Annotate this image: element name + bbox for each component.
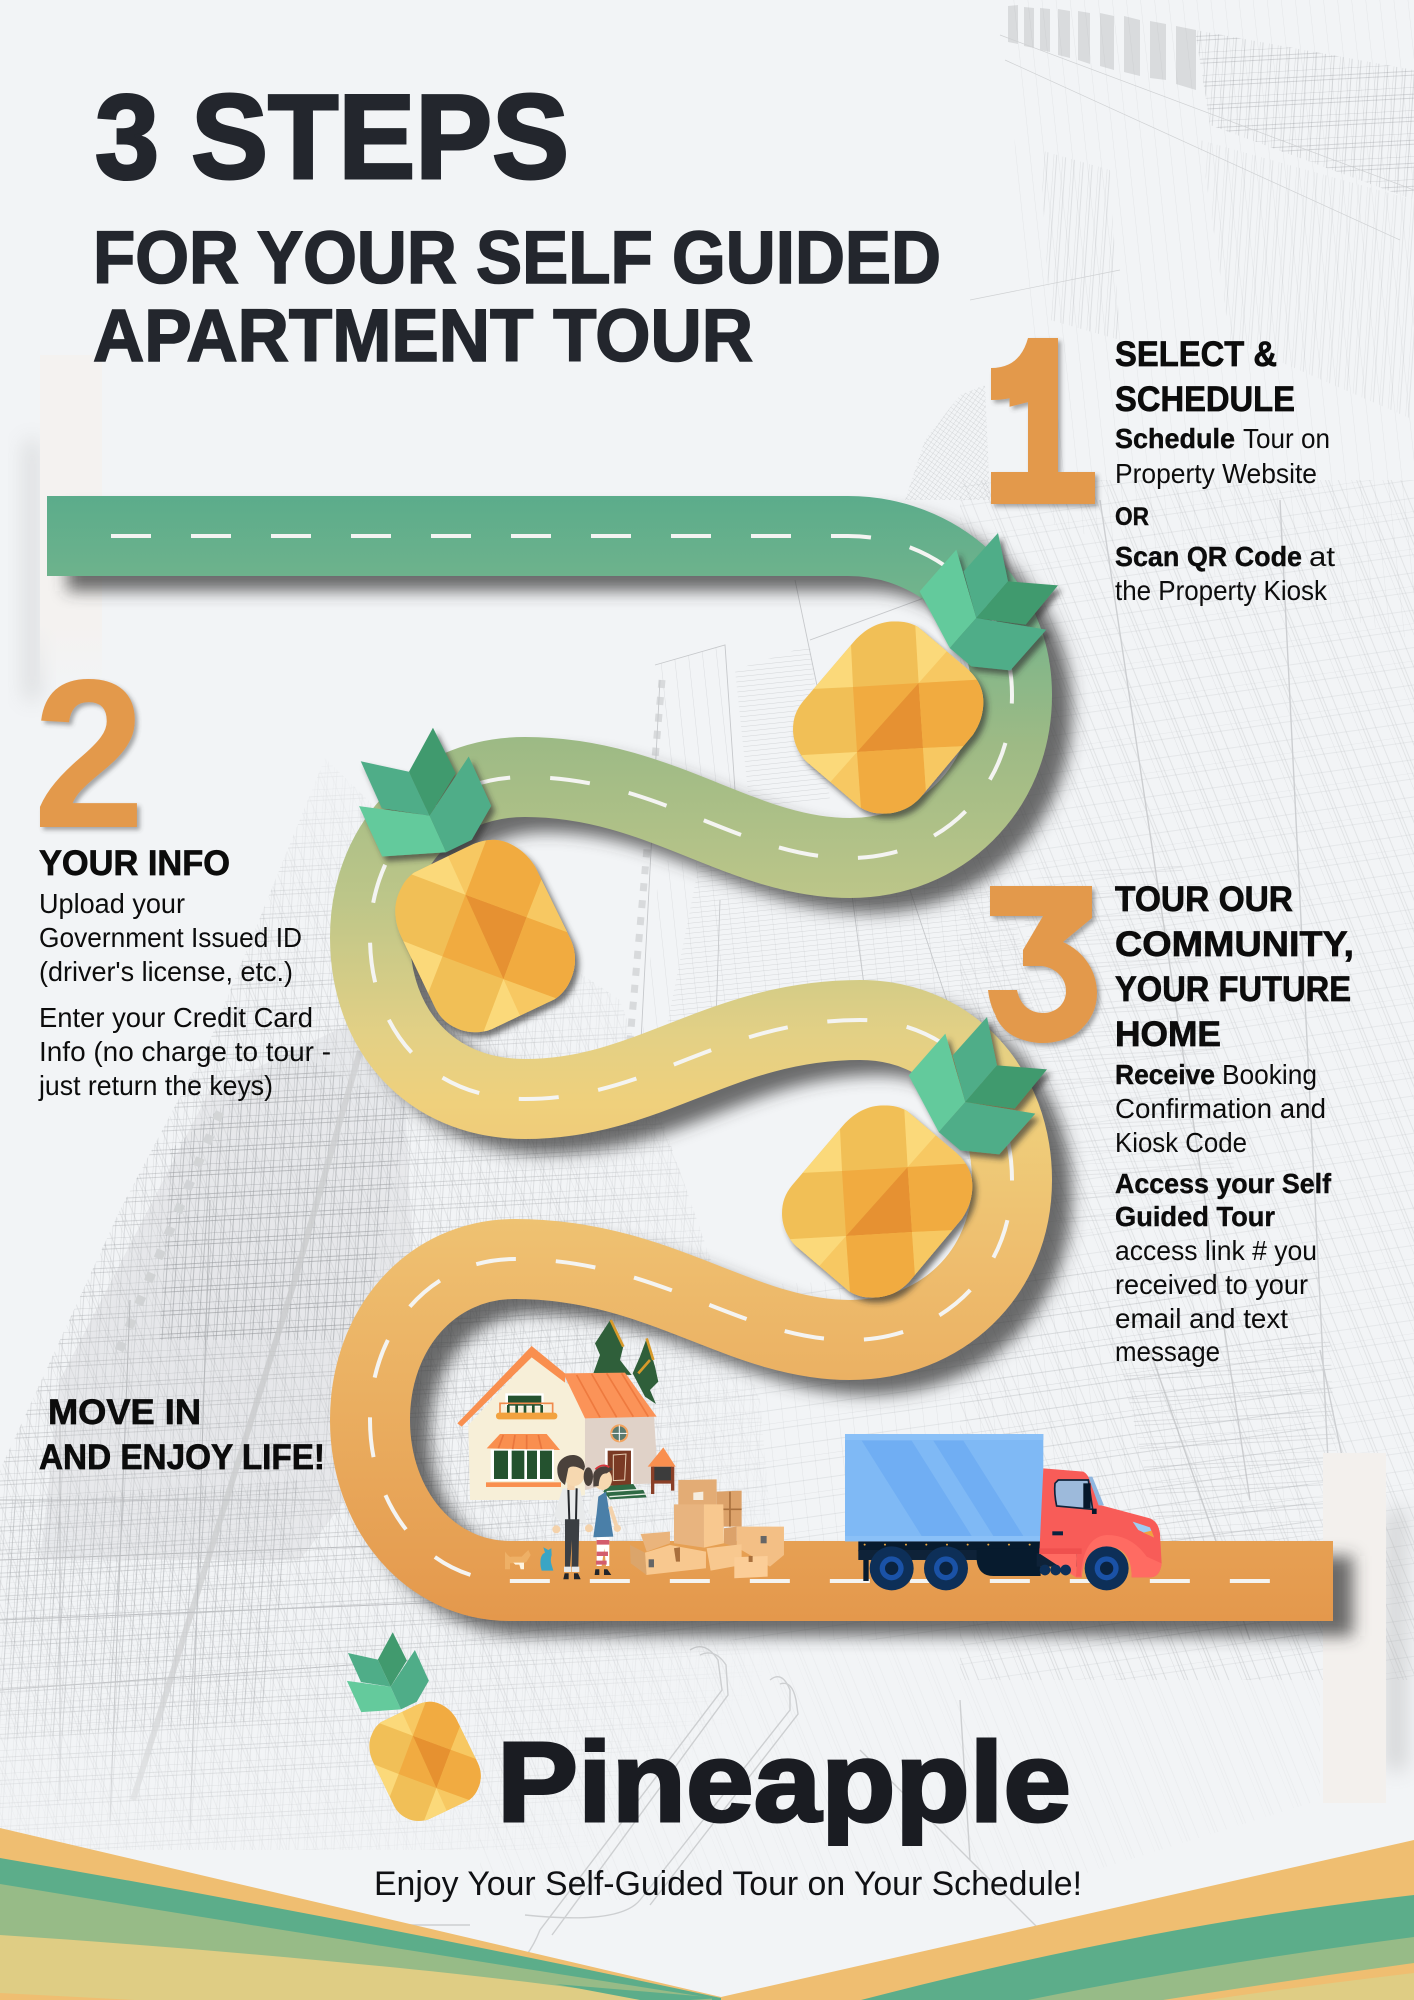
move in text — [39, 1393, 325, 1477]
bar: left off-white panel — [24, 355, 102, 700]
step 3 text: TOUR OUR — [1115, 880, 1293, 919]
illustration: house with trees — [457, 1319, 676, 1500]
step 3 text: Booking — [1222, 1059, 1317, 1090]
bar: right off-white panel — [1323, 1453, 1406, 1803]
step 3 text: received to your — [1115, 1269, 1308, 1300]
step 2 text: Government Issued ID — [39, 922, 302, 953]
step 3 text: COMMUNITY, — [1115, 925, 1354, 964]
title: FOR YOUR SELF GUIDED — [93, 216, 941, 299]
step 1 text: Tour on — [1243, 423, 1330, 454]
number 3 — [988, 886, 1102, 1048]
step 2 text: Upload your — [39, 888, 185, 919]
logo pineapple — [290, 1619, 543, 1862]
number 3: 3 — [987, 848, 1099, 1085]
move in text: AND ENJOY LIFE! — [39, 1438, 325, 1477]
step 1 text — [1115, 335, 1335, 606]
background wireframe: upper right building — [970, 0, 1414, 640]
step 3 text: access link # you — [1115, 1235, 1317, 1266]
illustration: truck — [845, 1434, 1162, 1590]
step 3 text: YOUR FUTURE — [1115, 970, 1351, 1009]
pineapple marker 2 — [268, 706, 675, 1099]
step 2 text: (driver's license, etc.) — [39, 956, 293, 987]
background wireframe: escalators — [375, 1647, 1060, 1970]
pineapple marker 3 — [759, 1017, 1047, 1334]
step 3 text: message — [1115, 1336, 1220, 1367]
move in text: MOVE IN — [48, 1393, 201, 1432]
logo wordmark: Pineapple — [497, 1719, 1071, 1845]
step 1 text: at — [1309, 541, 1335, 572]
background wireframe: mesh and middle building — [630, 385, 1040, 1060]
background wireframe: right side — [960, 480, 1414, 1680]
title — [93, 70, 941, 377]
step 3 text: email and text — [1115, 1303, 1288, 1334]
step 3 text: Access your Self — [1115, 1168, 1332, 1199]
footer bands left — [0, 1828, 721, 2000]
step 3 text — [1115, 880, 1354, 1367]
illustration: couple and pets — [505, 1455, 621, 1579]
step 1 text: OR — [1115, 503, 1149, 531]
step 3 text: Confirmation and — [1115, 1093, 1326, 1124]
illustration: moving boxes — [630, 1479, 784, 1578]
title: 3 STEPS — [95, 70, 569, 204]
step 3 text: HOME — [1115, 1015, 1221, 1054]
road — [47, 536, 1353, 1596]
step 1 text: SELECT & — [1115, 335, 1277, 374]
step 3 text: Receive — [1115, 1059, 1215, 1090]
number 1: 1 — [994, 346, 1090, 544]
step 1 text: the Property Kiosk — [1115, 575, 1328, 606]
step 3 text: Kiosk Code — [1115, 1127, 1247, 1158]
step 2 text — [38, 844, 331, 1101]
step 1 text: Property Website — [1115, 458, 1317, 489]
step 2 text: Enter your Credit Card — [39, 1002, 313, 1033]
step 2 text: Info (no charge to tour - — [39, 1036, 331, 1067]
tagline: Enjoy Your Self-Guided Tour on Your Schedule! — [374, 1865, 1082, 1903]
step 3 text: Guided Tour — [1115, 1201, 1275, 1232]
step 1 text: Schedule — [1115, 423, 1235, 454]
pineapple marker 1 — [770, 533, 1058, 850]
footer bands right — [721, 1840, 1414, 2000]
background wireframe: center lower — [420, 1260, 1320, 1900]
step 2 text: YOUR INFO — [39, 844, 230, 883]
title: APARTMENT TOUR — [93, 294, 753, 377]
number 2: 2 — [33, 635, 145, 872]
step 2 text: just return the keys) — [38, 1070, 273, 1101]
background wireframe: left lower building — [0, 758, 800, 1850]
step 1 text: SCHEDULE — [1115, 380, 1295, 419]
step 1 text: Scan QR Code — [1115, 541, 1302, 572]
